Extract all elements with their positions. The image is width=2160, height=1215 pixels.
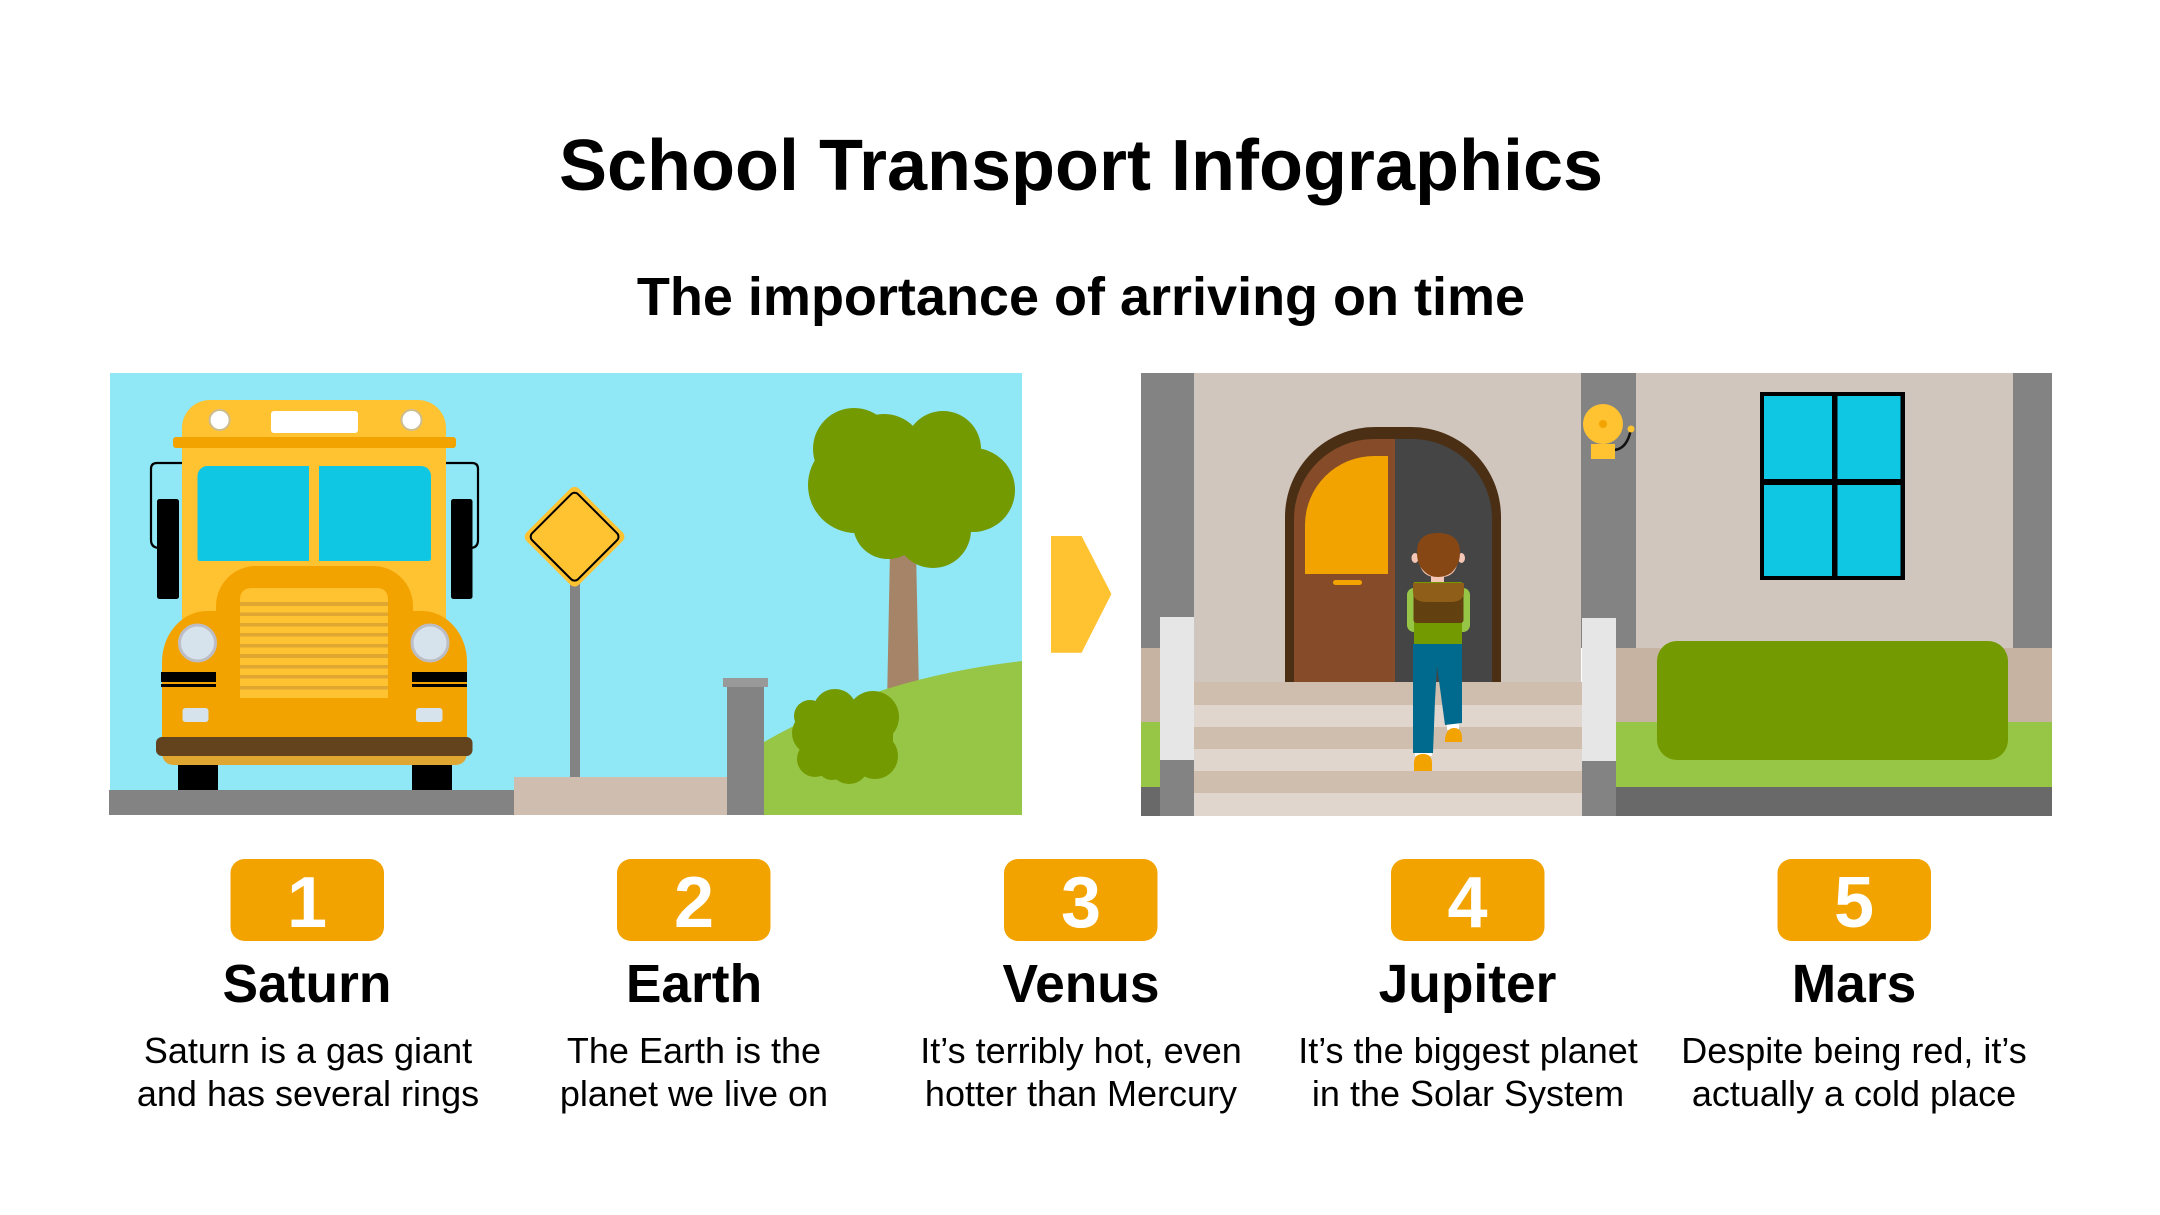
hair (1417, 533, 1460, 577)
number badge (617, 859, 770, 941)
trousers (1413, 644, 1462, 753)
roof lights and sign (210, 410, 422, 433)
door (1285, 427, 1501, 682)
description: It’s the biggest planet (1298, 1030, 1638, 1071)
far column (2013, 373, 2052, 648)
school bell (1583, 404, 1634, 459)
right stair pillar (1582, 618, 1616, 816)
description: and has several rings (137, 1073, 479, 1114)
heading: Mars (1792, 955, 1916, 1014)
under-bumper strip (162, 745, 467, 765)
item 1: Saturn (137, 859, 479, 1114)
shoes (1414, 728, 1462, 771)
sidewalk (514, 777, 727, 815)
number: 1 (287, 863, 327, 943)
heading: Earth (626, 955, 762, 1014)
item 5: Mars (1681, 859, 2027, 1114)
arms (1407, 588, 1470, 632)
number: 5 (1834, 863, 1874, 943)
panel: school bus at the stop (109, 373, 1022, 815)
description: hotter than Mercury (925, 1073, 1237, 1114)
hill (764, 661, 1022, 815)
steps (1194, 682, 1582, 816)
item 3: Venus (920, 859, 1242, 1114)
heading: Venus (1002, 955, 1160, 1014)
number badge (230, 859, 384, 941)
road sign (522, 484, 627, 777)
right column (1581, 373, 1636, 648)
left column (1141, 373, 1194, 648)
window (1760, 392, 1905, 580)
description: Saturn is a gas giant (144, 1030, 472, 1071)
heading: Jupiter (1379, 955, 1556, 1014)
tires (178, 760, 452, 790)
fog lights (182, 708, 442, 722)
lower body (162, 566, 467, 765)
number badge (1391, 859, 1544, 941)
bumper (156, 737, 472, 756)
item 2: Earth (560, 859, 828, 1114)
number: 3 (1061, 863, 1101, 943)
torso (1414, 582, 1462, 644)
socks (1415, 722, 1459, 756)
ground left (1141, 648, 1160, 816)
ears and neck (1412, 553, 1465, 584)
road (109, 790, 514, 815)
heading: Saturn (223, 955, 391, 1014)
description: Despite being red, it’s (1681, 1030, 2027, 1071)
hair outline (1420, 562, 1457, 576)
ground right (1616, 648, 2052, 816)
left stair pillar (1160, 617, 1194, 816)
panel: school entrance (1141, 373, 2052, 816)
hedge (1657, 641, 2008, 760)
student (1407, 533, 1470, 771)
backpack (1413, 583, 1464, 623)
grille (240, 588, 388, 698)
arrow (1051, 536, 1111, 653)
subtitle: The importance of arriving on time (637, 267, 1525, 327)
upper body (182, 400, 446, 620)
description: in the Solar System (1312, 1073, 1624, 1114)
number badge (1778, 859, 1931, 941)
number: 2 (674, 863, 714, 943)
description: actually a cold place (1692, 1073, 2016, 1114)
tree (808, 408, 1015, 705)
description: The Earth is the (567, 1030, 821, 1071)
headlights (180, 625, 448, 661)
bush (792, 689, 899, 784)
right wall (1636, 373, 2013, 648)
item 4: Jupiter (1298, 859, 1638, 1114)
school bus (151, 400, 478, 790)
centre wall (1194, 373, 1581, 683)
number: 4 (1447, 863, 1488, 943)
number badge (1004, 859, 1158, 941)
windshield (198, 466, 431, 561)
description: It’s terribly hot, even (920, 1030, 1242, 1071)
side stripes (161, 672, 467, 687)
fence pillar (723, 678, 768, 815)
title: School Transport Infographics (559, 126, 1603, 206)
roof bar (173, 437, 456, 448)
mirrors (151, 463, 478, 599)
sky (110, 373, 1022, 815)
description: planet we live on (560, 1073, 828, 1114)
